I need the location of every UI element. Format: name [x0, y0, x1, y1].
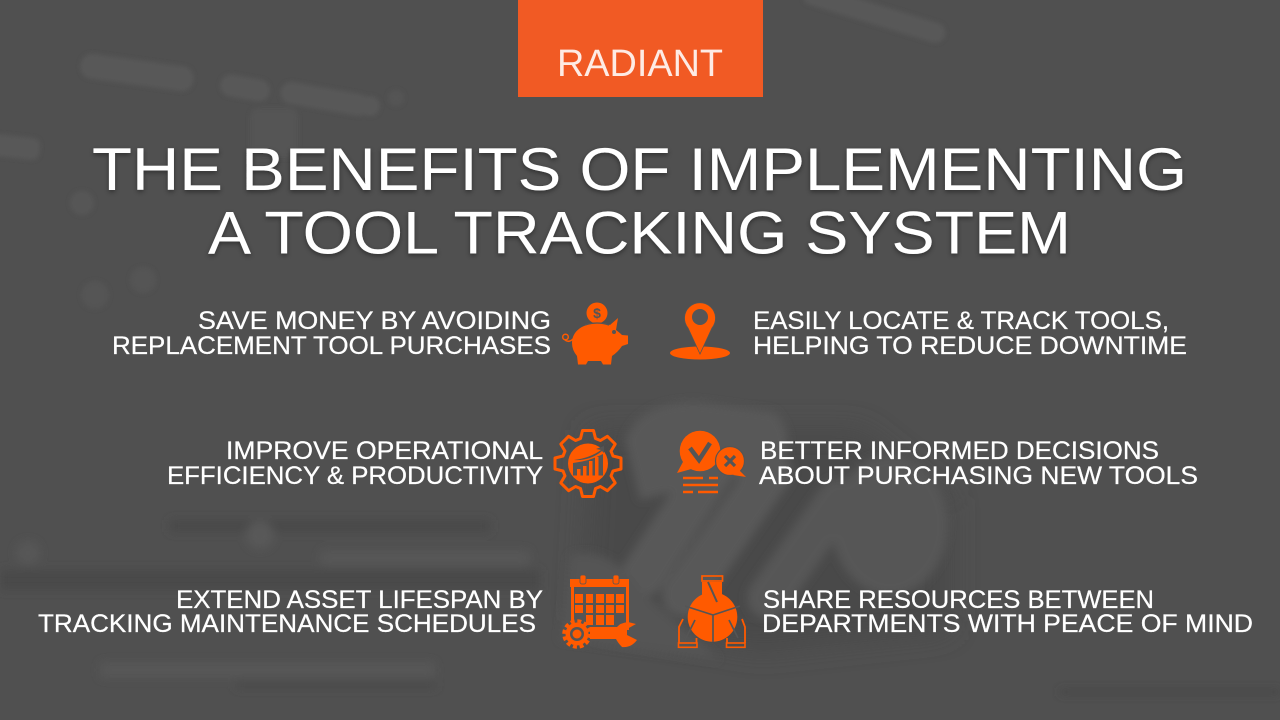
logo block: [518, 0, 763, 97]
benefit text: efficiency: EFFICIENCY & PRODUCTIVITY: [167, 462, 543, 490]
title: [92, 136, 1187, 266]
benefit text: asset lifespan: TRACKING MAINTENANCE SCHEDULES: [38, 610, 536, 638]
background: hand with fingers: [560, 402, 950, 660]
icon: piggy bank: [563, 302, 628, 364]
benefit text: informed decisions: ABOUT PURCHASING NEW TOOLS: [759, 462, 1198, 490]
title: THE BENEFITS OF IMPLEMENTING: [92, 136, 1187, 203]
icon: decision speech bubbles: [677, 431, 746, 492]
benefit text: share resources: SHARE RESOURCES BETWEEN: [763, 586, 1154, 614]
benefit text: efficiency: IMPROVE OPERATIONAL: [226, 437, 543, 465]
benefit text: share resources: DEPARTMENTS WITH PEACE OF MIND: [762, 610, 1253, 638]
benefit text: asset lifespan: EXTEND ASSET LIFESPAN BY: [176, 586, 543, 614]
background: tool handles, upper area: [0, 0, 948, 309]
icon: gear with growth chart: [555, 430, 621, 496]
benefit text: locate tools: EASILY LOCATE & TRACK TOOLS,: [753, 307, 1169, 335]
benefit text: save money: [112, 307, 551, 360]
benefit text: share resources: [762, 586, 1253, 638]
icon: piggy bank: $: [593, 305, 601, 321]
background: tools, lower left: [0, 520, 1280, 694]
icon: location pin: [670, 303, 730, 360]
benefit text: informed decisions: BETTER INFORMED DECISIONS: [760, 437, 1159, 465]
icon: calendar with gear and wrench: [564, 575, 637, 647]
benefit text: save money: REPLACEMENT TOOL PURCHASES: [112, 332, 551, 360]
benefit text: informed decisions: [759, 437, 1198, 490]
logo block: RADIANT: [557, 43, 723, 85]
benefit text: asset lifespan: [38, 586, 543, 638]
benefit text: locate tools: [753, 307, 1187, 360]
benefit text: efficiency: [167, 437, 543, 490]
benefit text: save money: SAVE MONEY BY AVOIDING: [198, 307, 551, 335]
icon: shared resources hands: [678, 576, 745, 647]
benefit text: locate tools: HELPING TO REDUCE DOWNTIME: [753, 332, 1187, 360]
title: A TOOL TRACKING SYSTEM: [208, 200, 1071, 266]
